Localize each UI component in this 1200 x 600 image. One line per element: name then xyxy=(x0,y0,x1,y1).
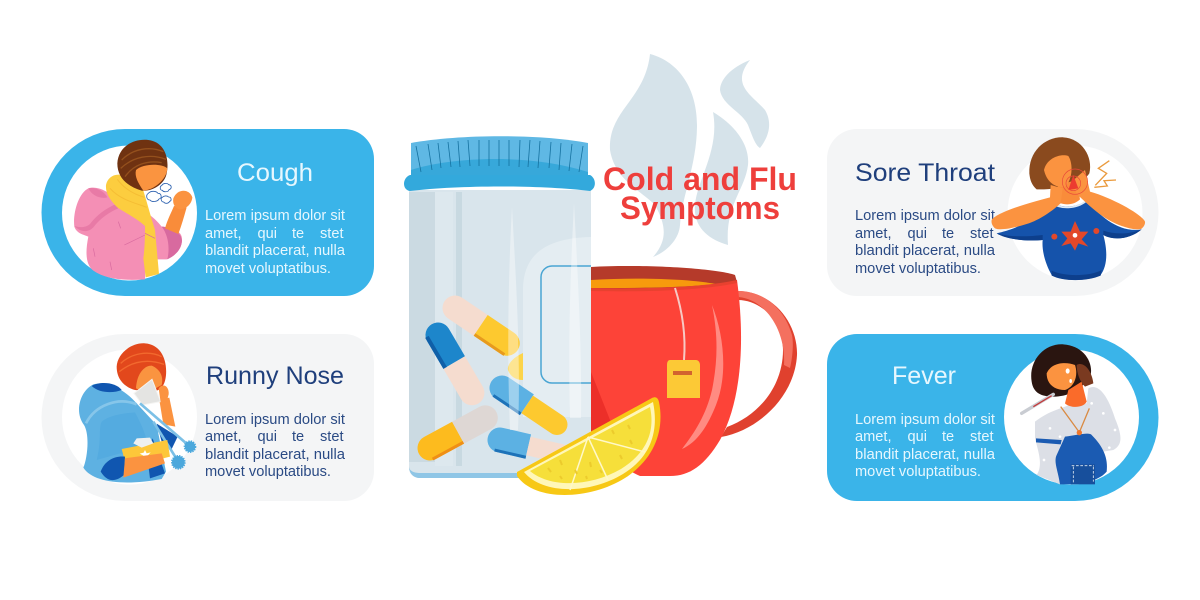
illustration: lemon slice xyxy=(517,397,661,495)
text block: cough: amet, xyxy=(205,226,242,242)
illustration: tea mug xyxy=(591,266,797,476)
text block: runny nose: Lorem ipsum dolor sit xyxy=(205,412,345,428)
text block: cough: Lorem ipsum dolor sit xyxy=(205,208,345,224)
text block: fever: amet, xyxy=(855,429,892,445)
heading: cough: Cough xyxy=(237,159,313,187)
icon: woman with thermometer xyxy=(1022,344,1120,484)
text block: sore throat: amet, xyxy=(855,226,892,242)
panel: sore throat xyxy=(827,129,1159,296)
mug handle xyxy=(721,291,797,437)
heading: runny nose: Runny Nose xyxy=(206,362,344,390)
text block: runny nose xyxy=(205,412,346,480)
text block: fever: te xyxy=(942,429,954,445)
text block: cough: qui xyxy=(258,226,277,242)
mug highlight xyxy=(682,305,723,449)
capsules xyxy=(413,291,576,469)
illustration: pill jar xyxy=(404,136,595,478)
jar label outline xyxy=(541,266,591,383)
text block: sore throat: stet xyxy=(970,226,994,242)
panel: fever xyxy=(827,334,1159,501)
text block: runny nose: te xyxy=(292,429,304,445)
text block: sore throat: movet voluptatibus. xyxy=(855,261,981,277)
text block: sore throat: te xyxy=(942,226,954,242)
text block: runny nose: movet voluptatibus. xyxy=(205,464,331,480)
text block: cough: blandit placerat, nulla xyxy=(205,243,346,259)
text block: fever: qui xyxy=(908,429,927,445)
text block: fever xyxy=(855,412,996,480)
text block: fever: stet xyxy=(970,429,994,445)
jar glare xyxy=(508,203,581,430)
text block: fever: blandit placerat, nulla xyxy=(855,447,996,463)
title: Cold and Flu xyxy=(603,161,797,197)
text block: cough: stet xyxy=(320,226,344,242)
text block: cough xyxy=(205,208,346,277)
text block: runny nose: stet xyxy=(320,429,344,445)
title: Symptoms xyxy=(620,190,780,226)
text block: runny nose: blandit placerat, nulla xyxy=(205,447,346,463)
tea bag xyxy=(667,288,700,398)
heading: fever: Fever xyxy=(892,362,956,390)
text block: sore throat: blandit placerat, nulla xyxy=(855,243,996,259)
icon: woman with tissue xyxy=(79,343,195,483)
text block: sore throat xyxy=(855,208,996,277)
panel: runny nose xyxy=(42,334,374,501)
icon: coughing woman xyxy=(74,140,192,280)
text block: cough: te xyxy=(292,226,304,242)
text block: sore throat: qui xyxy=(908,226,927,242)
title xyxy=(603,161,797,226)
text block: sore throat: Lorem ipsum dolor sit xyxy=(855,208,995,224)
jar lid xyxy=(404,136,595,191)
icon: steam xyxy=(610,54,769,257)
panel: cough xyxy=(42,129,374,296)
text block: runny nose: qui xyxy=(258,429,277,445)
text block: fever: Lorem ipsum dolor sit xyxy=(855,412,995,428)
icon: woman with sore throat xyxy=(992,137,1145,280)
text block: runny nose: amet, xyxy=(205,429,242,445)
text block: cough: movet voluptatibus. xyxy=(205,261,331,277)
heading: sore throat: Sore Throat xyxy=(855,159,995,187)
text block: fever: movet voluptatibus. xyxy=(855,464,981,480)
